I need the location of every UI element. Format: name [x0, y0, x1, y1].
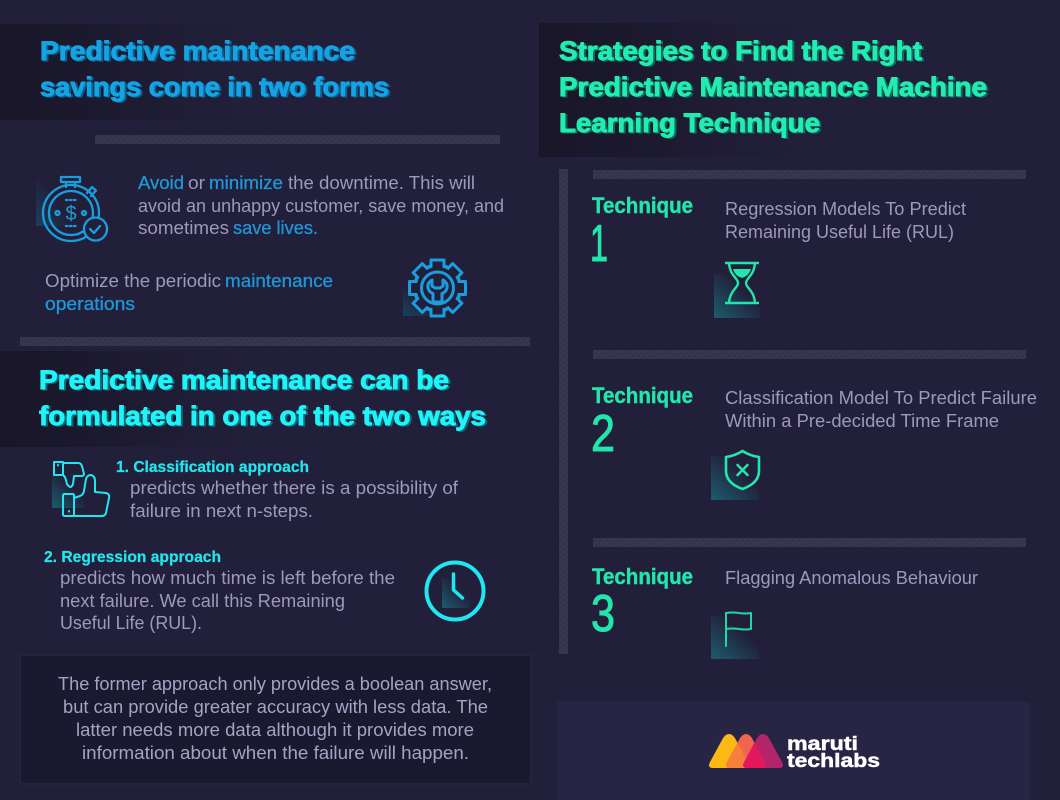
text: classification model: Classification Model To Predict Failure: [725, 388, 1037, 408]
text: regression models: [725, 199, 966, 242]
text: regression models: Regression Models To Predict: [725, 199, 966, 219]
label: technique 3: Technique: [592, 564, 693, 589]
text: classification model: Within a Pre-decided Time Frame: [725, 411, 999, 431]
callout: comparison: latter needs more data although it provides more: [76, 720, 474, 740]
label: technique 1: 1: [590, 215, 608, 273]
text: regression approach: Useful Life (RUL).: [60, 613, 202, 633]
text: optimize maintenance: operations: [45, 294, 135, 314]
text: avoid downtime: avoid an unhappy customer, save money, and: [138, 196, 504, 216]
heading: savings: savings come in two forms: [40, 72, 389, 102]
label: technique 1: Technique: [592, 193, 693, 218]
text: optimize maintenance: maintenance: [225, 271, 333, 291]
text: classification approach: [116, 459, 459, 521]
logo: maruti techlabs: [709, 734, 880, 768]
heading: two ways: Predictive maintenance can be: [39, 365, 449, 395]
label: technique 3: [591, 564, 693, 643]
heading: savings: Predictive maintenance: [40, 36, 355, 66]
text: regression models: Remaining Useful Life (RUL): [725, 222, 954, 242]
heading: strategies: Learning Technique: [559, 108, 820, 138]
heading: strategies: [559, 36, 987, 138]
text: regression approach: next failure. We call this Remaining: [60, 591, 345, 611]
text: classification approach: 1. Classification approach: [116, 459, 309, 476]
callout: comparison: [20, 655, 531, 784]
label: technique 3: 3: [591, 585, 615, 643]
heading: strategies: Strategies to Find the Right: [559, 36, 922, 66]
icon: shield with cross: [711, 451, 759, 500]
text: regression approach: 2. Regression approach: [44, 549, 221, 566]
label: technique 1: [590, 193, 693, 273]
icon: gear and wrench: [403, 260, 466, 316]
heading: savings: [40, 36, 389, 102]
icon: stopwatch: $: [65, 203, 77, 225]
text: optimize maintenance: Optimize the periodic: [45, 271, 221, 291]
panel: two ways heading: [0, 351, 486, 447]
label: technique 2: 2: [591, 405, 615, 463]
panel: strategies heading: [539, 23, 987, 157]
text: avoid downtime: Avoid: [138, 173, 184, 193]
label: technique 2: Technique: [592, 383, 693, 408]
text: optimize maintenance: [45, 271, 333, 314]
text: flagging: Flagging Anomalous Behaviour: [725, 568, 978, 588]
panel: technique 1: [590, 193, 966, 318]
icon: flag: [711, 612, 759, 659]
panel: savings forms: [36, 173, 504, 316]
text: avoid downtime: the downtime. This will: [288, 173, 475, 193]
text: regression approach: predicts how much time is left before the: [60, 568, 395, 588]
callout: comparison: The former approach only provides a boolean answer,: [58, 674, 492, 694]
panel: technique 3: [591, 564, 978, 659]
heading: two ways: formulated in one of the two ways: [39, 401, 486, 431]
callout: comparison: but can provide greater accuracy with less data. The: [63, 697, 488, 717]
text: avoid downtime: [138, 173, 504, 238]
panel: approaches: [44, 459, 484, 633]
text: regression approach: [44, 549, 395, 633]
text: classification approach: predicts whether there is a possibility of: [130, 478, 459, 498]
icon: stopwatch: [36, 177, 107, 241]
text: avoid downtime: sometimes: [138, 218, 229, 238]
icon: thumbs up and down: [52, 462, 109, 516]
icon: hourglass: [714, 263, 760, 318]
text: classification model: [725, 388, 1037, 431]
panel: logo footer: [557, 702, 1030, 800]
logo: maruti techlabs: maruti: [787, 734, 858, 755]
label: technique 2: [591, 383, 693, 463]
heading: two ways: [39, 365, 486, 431]
icon: clock: [426, 562, 484, 620]
text: classification approach: failure in next n-steps.: [130, 501, 313, 521]
panel: technique 2: [591, 383, 1037, 500]
text: avoid downtime: save lives.: [233, 218, 318, 238]
heading: strategies: Predictive Maintenance Machine: [559, 72, 987, 102]
text: avoid downtime: minimize: [209, 173, 283, 193]
text: avoid downtime: or: [188, 173, 205, 193]
callout: comparison: information about when the failure will happen.: [82, 743, 469, 763]
panel: savings heading: [0, 24, 389, 120]
logo: maruti techlabs: techlabs: [787, 751, 880, 772]
